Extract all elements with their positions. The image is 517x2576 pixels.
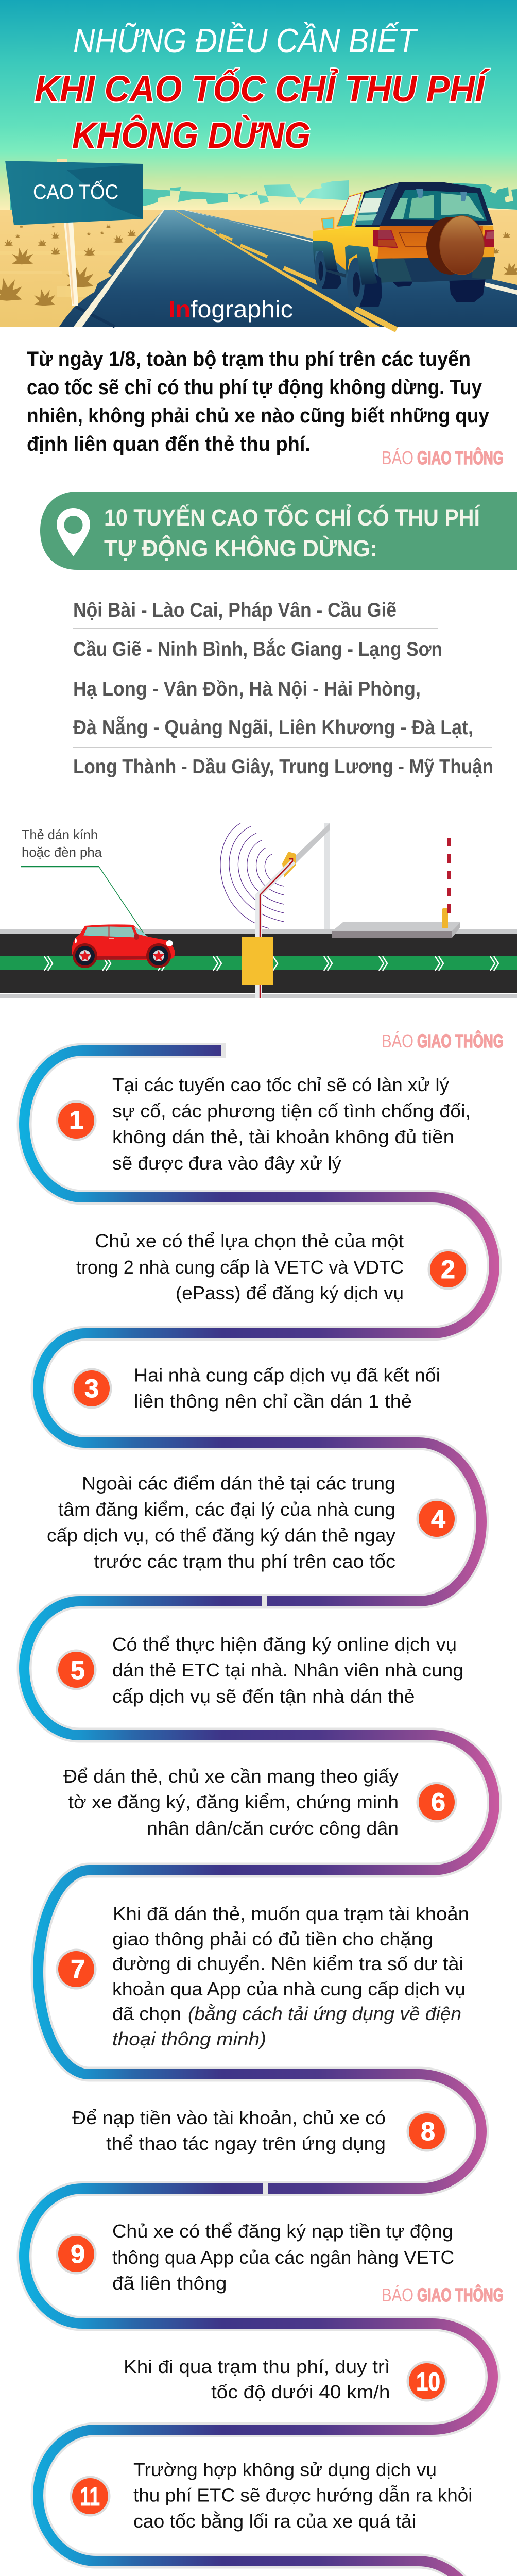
step 8: thể thao tác ngay trên ứng dụng [106,2133,386,2154]
step 4: Ngoài các điểm dán thẻ tại các trung [82,1473,395,1494]
step 4: 4 [431,1504,445,1533]
barrier pole [447,838,451,913]
side body [313,226,380,270]
sand ground [0,210,517,327]
intro paragraph: Từ ngày 1/8, toàn bộ trạm thu phí trên các tuyến [27,348,471,370]
desert plants [0,224,517,306]
right tail light [482,230,494,247]
road top curb [0,929,517,934]
step 2: trong 2 nhà cung cấp là VETC và VDTC [76,1257,404,1278]
pole [255,894,262,998]
red wire [260,859,292,998]
vertical gantry post [324,823,330,929]
callout label: hoặc đèn pha [22,844,102,860]
step 6: tờ xe đăng ký, đăng kiểm, chứng minh [68,1791,399,1812]
yellow toll box [242,937,273,985]
step 7: khoản qua App của nhà cung cấp dịch vụ [112,1978,466,1999]
step 1: Tại các tuyến cao tốc chỉ sẽ có làn xử lý [112,1074,449,1095]
cabin frame [355,182,493,227]
step 3 [71,1364,440,1412]
step 9: Chủ xe có thể đăng ký nạp tiền tự động [112,2221,453,2242]
step 2 [76,1230,469,1303]
sky background [0,0,517,210]
callout label [22,827,102,860]
step 3: 3 [84,1374,99,1403]
route list: Nội Bài - Lào Cai, Pháp Vân - Cầu Giẽ [73,599,397,621]
banner text [104,504,480,562]
sign post shadow [76,307,115,327]
step 7: 7 [71,1955,85,1984]
step 8: Để nạp tiền vào tài khoản, chủ xe có [72,2107,386,2128]
right road line [184,210,517,295]
step 5: 5 [71,1656,85,1685]
card reader [282,852,296,877]
front side window [336,192,363,227]
side wheel [347,258,382,307]
bumper [375,257,495,283]
step 4: cấp dịch vụ, có thể đăng ký dán thẻ ngay [47,1525,395,1546]
step 6: Để dán thẻ, chủ xe cần mang theo giấy [63,1766,399,1787]
route list [73,599,493,778]
step 9: đã liên thông [112,2273,227,2294]
jeep [313,182,495,307]
serpentine timeline [24,1050,494,2576]
step 6: 6 [431,1788,445,1817]
step 10: 10 [416,2367,440,2396]
watermark 3: BÁO [382,2284,413,2306]
step 1: sự cố, các phương tiện cố tình chống đối, [112,1100,471,1122]
step 9: 9 [71,2240,85,2268]
step 1 [56,1074,471,1174]
intro paragraph: nhiên, không phải chủ xe nào cũng biết những quy [27,404,490,427]
step 7: đường di chuyển. Nên kiểm tra số dư tài [112,1953,463,1974]
watermark 2: BÁO [382,1030,413,1052]
step 7: giao thông phải có đủ tiền cho chặng [112,1928,433,1950]
title line 2: KHI CAO TỐC CHỈ THU PHÍ [35,69,490,110]
banner: 10 routes heading [40,492,517,570]
rear window glass [390,189,487,221]
route list: Đà Nẵng - Quảng Ngãi, Liên Khương - Đà Lạt, [73,716,473,739]
step 10: Khi đi qua trạm thu phí, duy trì [124,2356,390,2377]
step 5: dán thẻ ETC tại nhà. Nhân viên nhà cung [112,1659,463,1681]
step 4 [47,1473,457,1572]
left road line [74,210,164,327]
intro paragraph: cao tốc sẽ chỉ có thu phí tự động không dừng. Tuy [27,376,482,399]
step 4: tâm đăng kiểm, các đại lý của nhà cung [58,1499,395,1520]
step 1: 1 [69,1106,83,1134]
callout label: Thẻ dán kính [22,827,98,842]
watermark 1: BÁO [382,447,413,468]
step 3: Hai nhà cung cấp dịch vụ đã kết nối [134,1364,440,1386]
road [59,210,517,327]
step 8 [72,2107,447,2154]
gantry arm [291,823,330,863]
step 11: thu phí ETC sẽ được hướng dẫn ra khỏi [133,2484,473,2506]
mirror [322,218,334,229]
lane chevrons [44,956,498,971]
step 6: nhân dân/căn cước công dân [147,1818,399,1839]
sign post [57,159,78,306]
step 11: 11 [80,2482,100,2511]
route list: Cầu Giẽ - Ninh Bình, Bắc Giang - Lạng Sơn [73,638,442,660]
icon: location pin [57,508,90,556]
left tail light [373,230,398,248]
step 7: Khi đã dán thẻ, muốn qua trạm tài khoản [113,1903,469,1924]
step 5: cấp dịch vụ sẽ đến tận nhà dán thẻ [112,1686,415,1707]
watermark 1 [382,447,504,468]
step 10 [124,2356,447,2402]
center dashed yellow line [198,223,397,330]
watermark 3 [382,2284,504,2306]
step 11: Trường hợp không sử dụng dịch vụ [133,2459,437,2480]
spare tire [426,216,484,275]
step 5: Có thể thực hiện đăng ký online dịch vụ [112,1634,457,1655]
banner text: TỰ ĐỘNG KHÔNG DỪNG: [104,535,377,562]
barrier post [442,908,448,928]
front wheel [315,251,341,289]
lower arm [256,859,296,895]
step 11: cao tốc bằng lối ra của xe quá tải [133,2511,416,2532]
rear panel [377,226,494,260]
step 11 [70,2459,473,2532]
step 7: đã chọn [112,2003,181,2024]
far rear tyres [449,278,486,302]
banner text: 10 TUYẾN CAO TỐC CHỈ CÓ THU PHÍ [104,504,480,531]
step 8: 8 [421,2117,435,2146]
step 2: Chủ xe có thể lựa chọn thẻ của một [95,1230,404,1251]
road sign: CAO TỐC [33,180,118,204]
rear side window [355,188,386,225]
callout line [99,867,144,934]
road bottom curb [0,994,517,998]
step 7: (bằng cách tải ứng dụng về điện [188,2003,461,2024]
step 3: liên thông nên chỉ cần dán 1 thẻ [134,1391,412,1412]
diagram: toll gantry [0,823,517,998]
signal arcs [220,823,284,928]
step 6 [63,1766,457,1839]
timeline border [24,1050,494,2576]
step 7 [56,1903,469,2049]
platform [332,922,460,938]
road surface [0,934,517,993]
step 1: sẽ được đưa vào đây xử lý [112,1153,341,1174]
hero illustration [0,0,517,330]
route list: Hạ Long - Vân Đồn, Hà Nội - Hải Phòng, [73,678,421,700]
license plate outline [399,232,429,246]
wheel fenders [345,245,377,285]
sand bands [0,251,124,297]
step 5 [56,1634,463,1707]
step 10: tốc độ dưới 40 km/h [211,2381,390,2402]
intro paragraph: định liên quan đến thẻ thu phí. [27,433,311,455]
red car [72,924,175,968]
step 7: thoại thông minh) [112,2028,266,2049]
title line 1: NHỮNG ĐIỀU CẦN BIẾT [73,22,418,59]
step 2: (ePass) để đăng ký dịch vụ [176,1282,404,1303]
green lane [0,956,517,970]
watermark 2 [382,1030,504,1052]
center solid yellow line [175,210,380,327]
timeline stroke [24,1050,494,2576]
running board [326,269,346,278]
step 9: thông qua App của các ngân hàng VETC [112,2247,454,2268]
step 2: 2 [441,1255,455,1284]
city skyline [0,180,517,210]
infographic label: Infographic [168,296,293,323]
step 9 [56,2221,454,2294]
rear pillar [372,182,399,225]
step 4: trước các trạm thu phí trên cao tốc [94,1551,395,1572]
title line 3: KHÔNG DỪNG [72,115,311,156]
intro paragraph [27,348,490,455]
step 1: không dán thẻ, tài khoản không đủ tiền [112,1126,454,1147]
road sign [5,161,143,225]
